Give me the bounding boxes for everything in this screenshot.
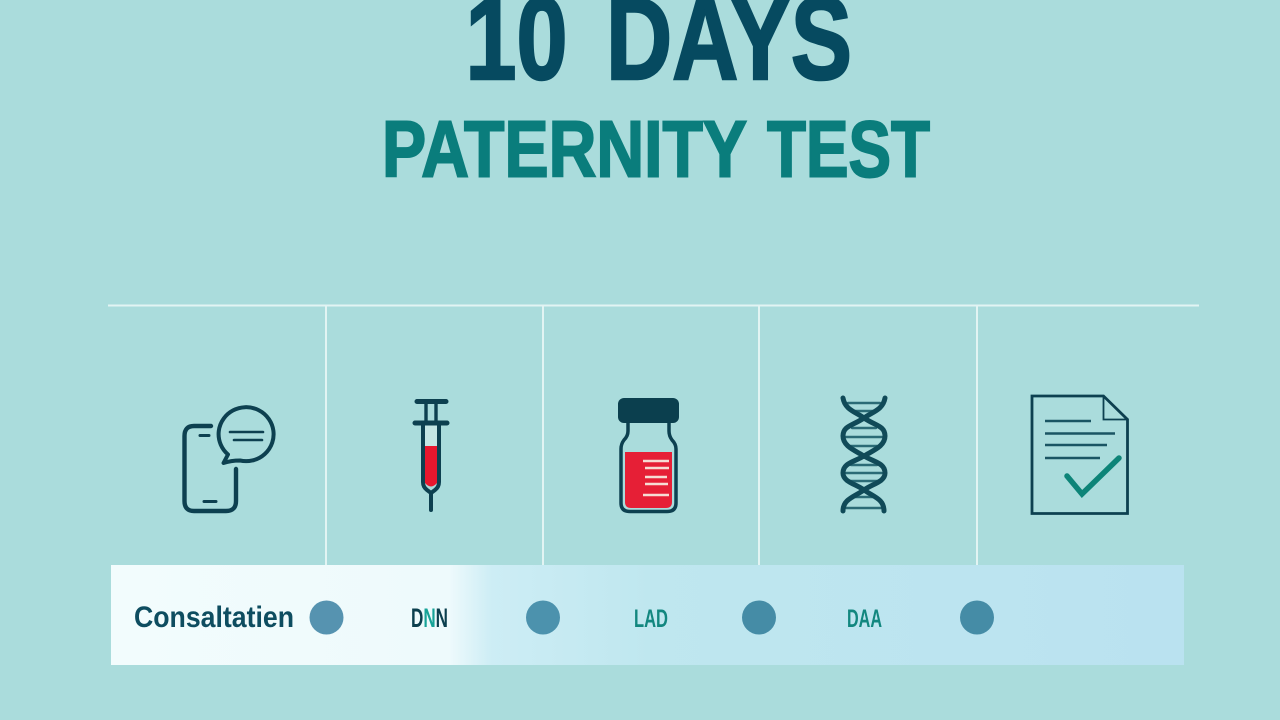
timeline marker 1 [310, 600, 344, 634]
icon: phone with chat bubble [184, 407, 274, 511]
icon: DNA double helix [843, 398, 885, 511]
icon: document with check mark [1032, 396, 1128, 514]
subtitle: paternity test: TEST [767, 104, 930, 194]
label: LAD: LAD [634, 605, 668, 633]
timeline marker 4 [960, 600, 994, 634]
icon: vial with red liquid [618, 398, 679, 512]
timeline marker 2 [526, 600, 560, 634]
label: consultation: Consaltatien [134, 601, 294, 634]
timeline bar [111, 565, 1184, 665]
icon: syringe with blood [415, 402, 447, 510]
label: DAA: DAA [847, 605, 882, 633]
label: DNA: DNN [411, 603, 448, 633]
timeline marker 3 [742, 600, 776, 634]
title: 10 days [466, 0, 852, 104]
subtitle: paternity test: PATERNITY [382, 104, 747, 194]
